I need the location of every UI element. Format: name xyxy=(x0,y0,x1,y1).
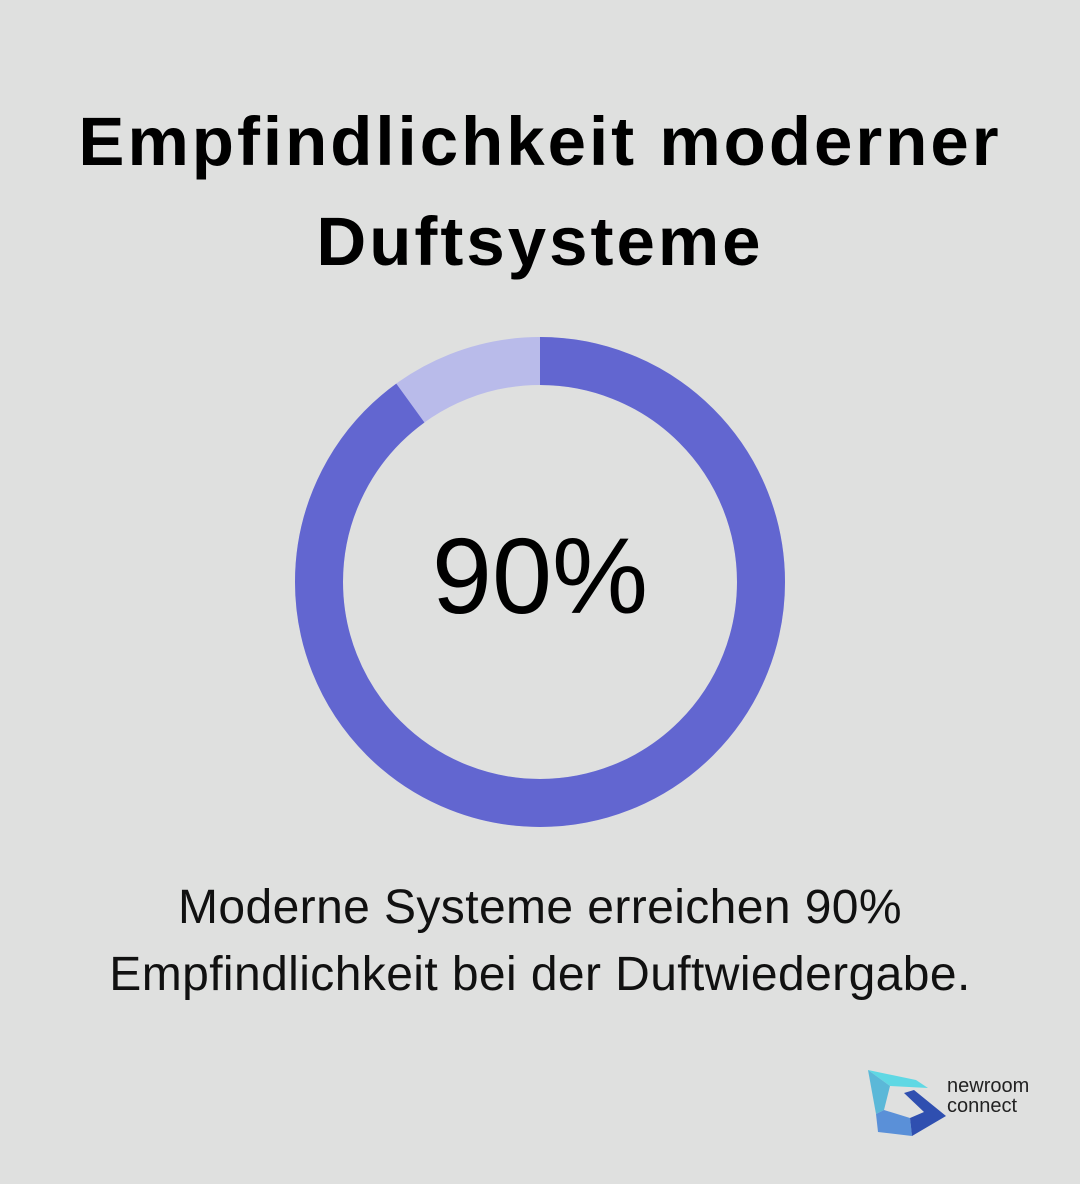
logo xyxy=(868,1070,1029,1136)
description: Empfindlichkeit bei der Duftwiedergabe. xyxy=(109,948,971,1001)
value 90%: 90% xyxy=(432,515,648,636)
title xyxy=(78,103,1002,280)
logo: newroom xyxy=(947,1075,1029,1097)
description: Moderne Systeme erreichen 90% xyxy=(178,881,902,934)
description xyxy=(109,881,971,1001)
title: Duftsysteme xyxy=(316,203,764,280)
title: Empfindlichkeit moderner xyxy=(78,103,1002,180)
logo: connect xyxy=(947,1095,1017,1117)
